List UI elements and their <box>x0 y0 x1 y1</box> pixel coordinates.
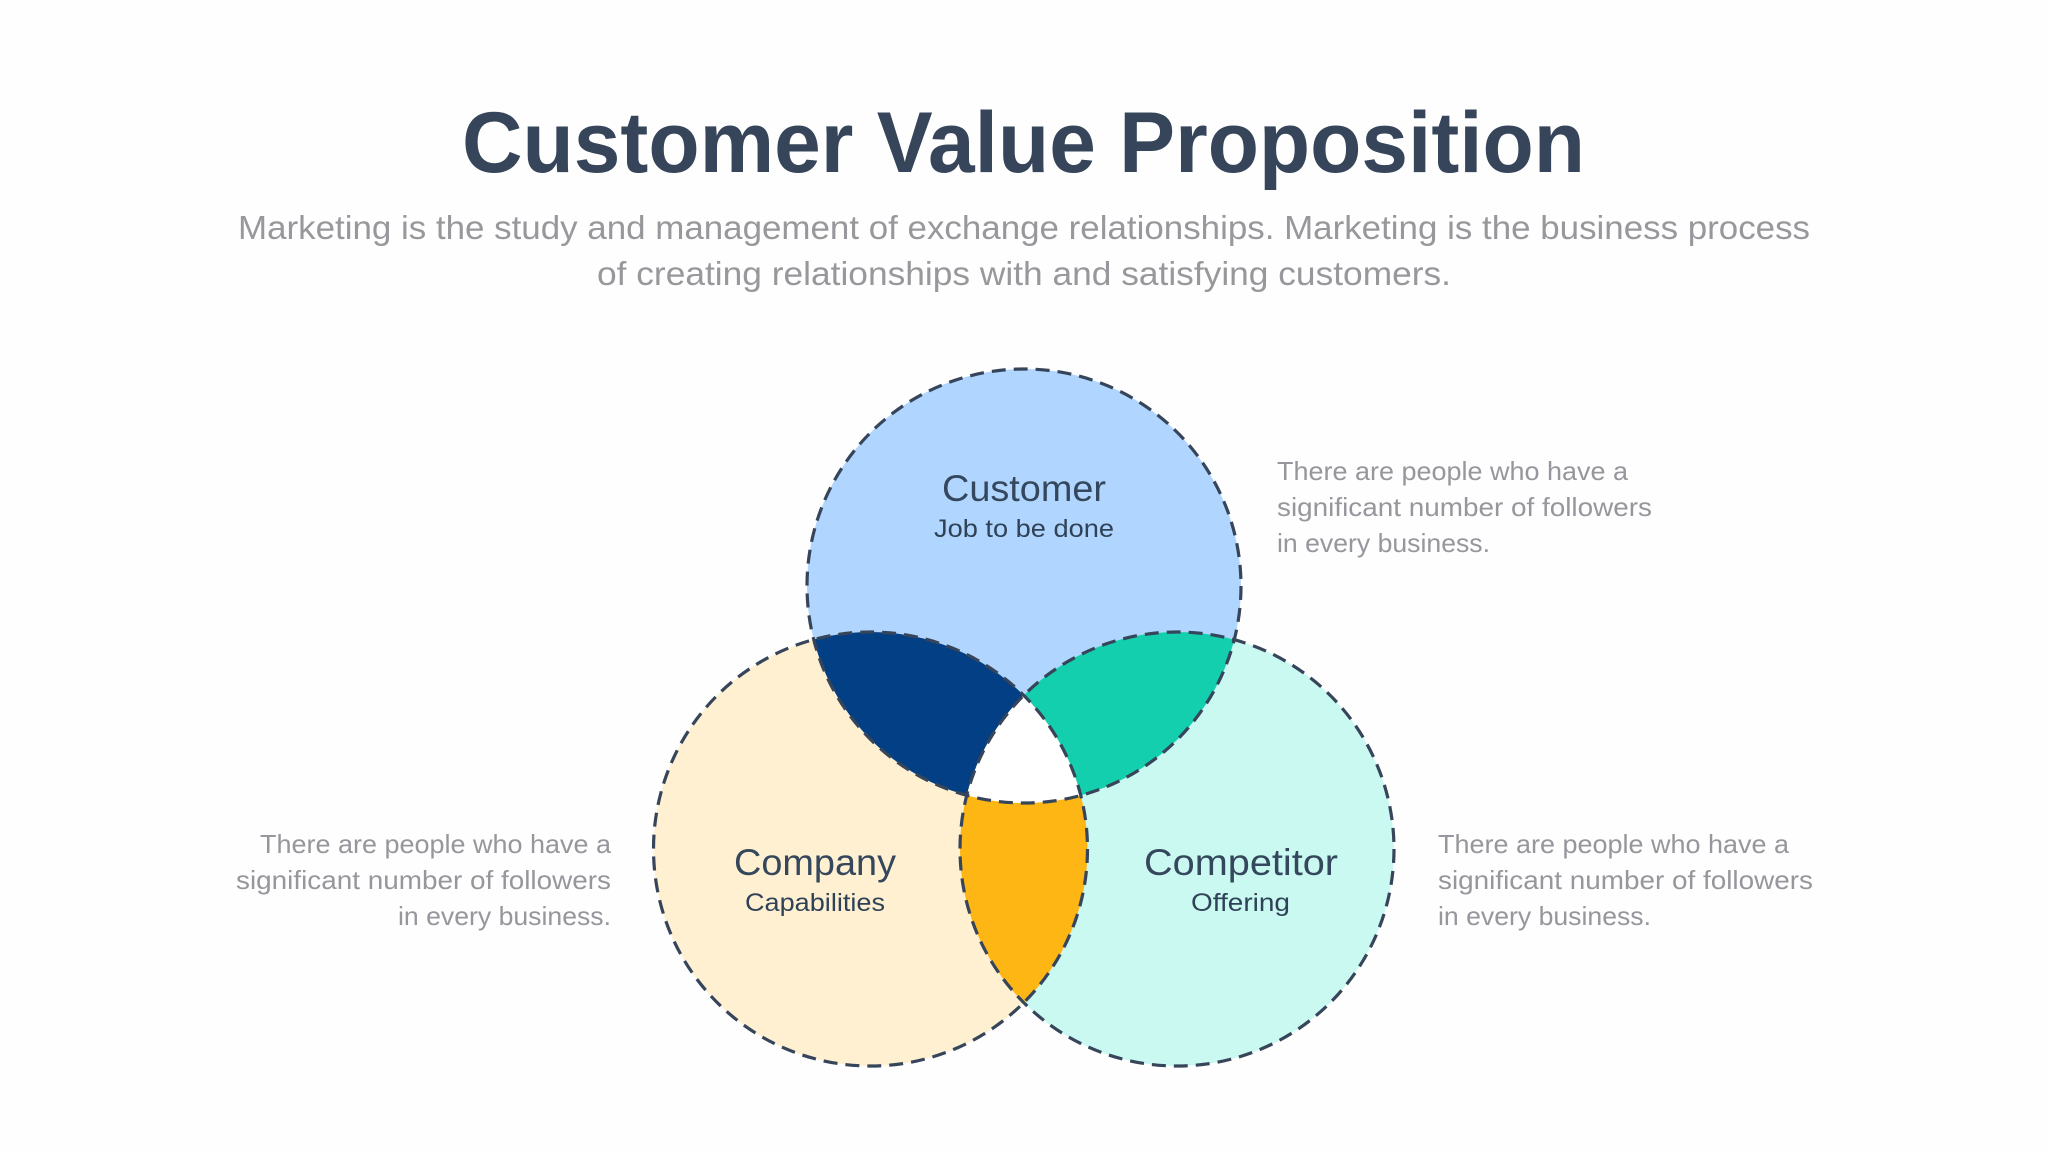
text block: competitor note: There are people who have a <box>1438 829 1790 859</box>
text block: competitor note: significant number of followers <box>1438 865 1813 895</box>
subtitle: Marketing is the study and management of exchange relationships. Marketing is the business process <box>238 209 1810 246</box>
overlap: centre <box>968 696 1080 803</box>
overlap: customer and company <box>815 632 1022 794</box>
text block: customer note: There are people who have a <box>1277 456 1629 486</box>
overlap: customer and competitor <box>968 632 1234 795</box>
text block: customer note <box>1277 456 1652 558</box>
dashed outline: competitor <box>960 632 1394 1066</box>
text block: company note: significant number of followers <box>236 865 611 895</box>
label: competitor: Offering <box>1191 889 1290 917</box>
label: customer: Job to be done <box>934 515 1114 543</box>
dashed outline: customer <box>807 369 1241 803</box>
label: customer: Customer <box>942 468 1106 509</box>
subtitle: of creating relationships with and satisfying customers. <box>597 255 1451 292</box>
overlap: company and competitor <box>960 696 1088 1002</box>
text block: company note: in every business. <box>398 901 611 931</box>
label: company: Company <box>734 842 897 883</box>
circle: company <box>654 632 1088 1066</box>
venn diagram <box>654 369 1394 1066</box>
text block: competitor note <box>1438 829 1813 931</box>
text block: company note <box>236 829 612 931</box>
label: competitor <box>1144 842 1338 917</box>
label: company: Capabilities <box>745 889 885 917</box>
dashed outline: company <box>654 632 1088 1066</box>
label: competitor: Competitor <box>1144 842 1338 883</box>
circle: customer <box>807 369 1241 803</box>
text block: competitor note: in every business. <box>1438 901 1651 931</box>
text block: customer note: in every business. <box>1277 528 1490 558</box>
text block: customer note: significant number of followers <box>1277 492 1652 522</box>
label: customer <box>934 468 1114 543</box>
circle: competitor <box>960 632 1394 1066</box>
label: company <box>734 842 897 917</box>
text block: company note: There are people who have a <box>260 829 612 859</box>
subtitle <box>238 209 1810 292</box>
title: Customer Value Proposition <box>462 95 1585 191</box>
